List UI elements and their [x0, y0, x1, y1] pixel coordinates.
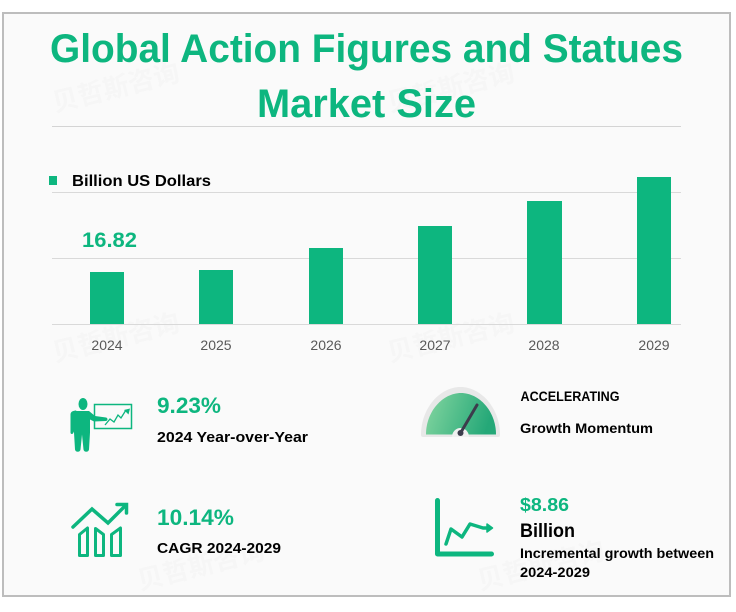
- bar chart: [52, 177, 681, 353]
- text: 贝哲斯咨询: [134, 535, 268, 596]
- title: Global Action Figures and Statues: [50, 27, 683, 71]
- stat: $8.86 billion incremental growth: [520, 495, 714, 580]
- text: 贝哲斯咨询: [49, 307, 183, 368]
- stat: 9.23%: 9.23%: [157, 393, 221, 418]
- stat: $8.86 billion incremental growth: Incremental growth between: [520, 545, 714, 561]
- axis labels: 2025: [200, 337, 232, 353]
- axis labels: 2024: [91, 337, 123, 353]
- stat: $8.86 billion incremental growth: 2024-2029: [520, 564, 590, 580]
- stat: $8.86 billion incremental growth: $8.86: [520, 495, 569, 515]
- text: 贝哲斯咨询: [49, 57, 183, 118]
- text: 贝哲斯咨询: [384, 57, 518, 118]
- axis labels: 2029: [638, 337, 670, 353]
- text: 贝哲斯咨询: [384, 307, 518, 368]
- title: Market Size: [257, 82, 476, 126]
- axis labels: 2027: [419, 337, 451, 353]
- stat: 9.23%: [157, 393, 308, 446]
- icon: growth bars with arrow: [73, 504, 126, 556]
- axis labels: 2028: [528, 337, 560, 353]
- stat: accelerating growth momentum: [520, 389, 653, 436]
- stat: 10.14%: CAGR 2024-2029: [157, 541, 281, 557]
- icon: line chart with arrow: [438, 500, 492, 554]
- axis labels: [91, 337, 670, 353]
- text: 贝哲斯咨询: [474, 535, 608, 596]
- stat: accelerating growth momentum: Growth Momentum: [520, 420, 653, 436]
- icon: speedometer gauge: [421, 387, 500, 437]
- stat: 10.14%: [157, 505, 281, 557]
- stat: 9.23%: 2024 Year-over-Year: [157, 430, 308, 446]
- stat: 10.14%: 10.14%: [157, 505, 234, 530]
- legend: Billion US Dollars: Billion US Dollars: [72, 173, 211, 190]
- stat: accelerating growth momentum: ACCELERATING: [520, 389, 620, 404]
- icon: presenter with chart: [70, 398, 132, 452]
- title: [50, 27, 683, 126]
- value label: 2024: 16.82: [82, 229, 137, 252]
- axis labels: 2026: [310, 337, 342, 353]
- stat: $8.86 billion incremental growth: Billion: [520, 521, 575, 542]
